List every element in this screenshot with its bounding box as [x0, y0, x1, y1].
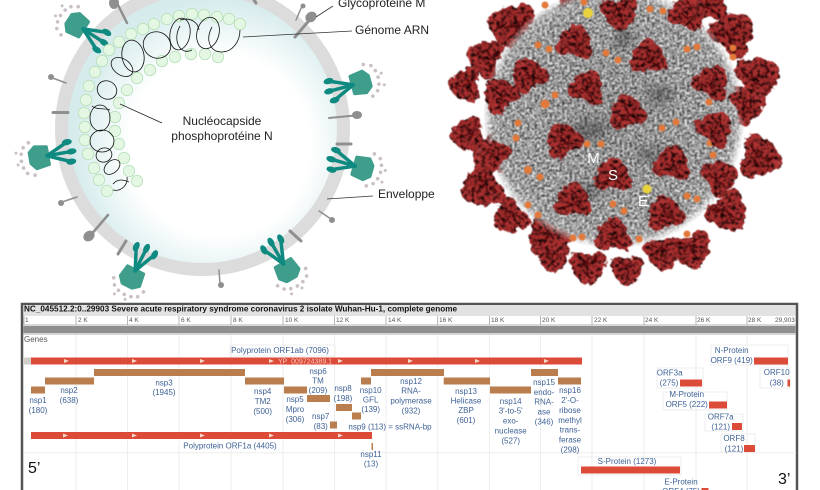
labels M, S, E: M	[587, 150, 600, 167]
ruler: 20 K	[542, 317, 556, 324]
gene labels: Polyprotein ORF1a (4405)	[183, 442, 277, 450]
ruler: 12 K	[336, 317, 350, 324]
gene labels: (346)	[535, 418, 554, 426]
gene labels: (601)	[457, 416, 476, 425]
gene labels: 2'-O-	[561, 396, 579, 405]
gene labels: (306)	[286, 415, 305, 424]
polyprotein ORF1ab bar	[24, 358, 582, 366]
ruler: 4 K	[129, 317, 139, 324]
gene labels: (298)	[561, 446, 580, 454]
polyprotein ORF1a bar	[31, 432, 372, 439]
gene labels: trans-	[560, 426, 581, 434]
gene labels: methyl	[558, 416, 582, 425]
ruler	[24, 316, 796, 325]
ruler: 6 K	[181, 317, 191, 324]
gene labels: (13)	[364, 460, 378, 468]
gene labels: nsp13	[455, 387, 477, 396]
gene labels: (638)	[60, 396, 79, 405]
spike proteins	[13, 0, 391, 307]
gene labels: nsp7	[312, 412, 330, 421]
gene labels: M-Protein	[669, 390, 704, 399]
gene labels: TM2	[255, 397, 271, 406]
ruler: 8 K	[233, 317, 243, 324]
gene labels: nsp10	[360, 386, 382, 395]
gene labels: nsp5	[286, 395, 304, 404]
label: Nucléocapside phosphoprotéine N	[120, 104, 273, 143]
gene labels: exo-	[503, 416, 519, 426]
gene labels: (500)	[253, 407, 272, 416]
ruler: 10 K	[285, 317, 299, 324]
back spikes	[447, 0, 789, 286]
gene labels: nsp8	[334, 384, 352, 393]
label: Enveloppe: Enveloppe	[378, 187, 435, 201]
viral envelope	[62, 0, 344, 270]
gene labels	[29, 346, 790, 490]
gene labels: nsp6	[309, 367, 327, 376]
label: Glycoprotéine M	[316, 0, 425, 17]
gene labels: nsp4	[254, 387, 272, 396]
gene labels: (527)	[501, 436, 520, 446]
ruler: 28 K	[748, 317, 762, 324]
gene labels: Polyprotein ORF1ab (7096)	[231, 346, 329, 355]
gene labels: ribose	[559, 406, 581, 415]
gene labels: Mpro	[286, 405, 305, 414]
labels M, S, E: S	[608, 167, 618, 184]
gene labels: nsp1	[29, 396, 47, 405]
nucleocapsid N proteins	[78, 8, 246, 197]
gene labels: ZBP	[458, 406, 474, 415]
gene labels: (1945)	[152, 388, 176, 397]
gene labels: (121)	[725, 444, 744, 454]
gene labels: Helicase	[451, 396, 482, 406]
gene labels: nuclease	[495, 426, 527, 436]
grid lines	[24, 335, 796, 490]
gene labels: nsp2	[60, 386, 78, 395]
gene labels: (209)	[309, 386, 328, 395]
gene labels: ORF8	[723, 434, 745, 443]
gene labels: TM	[312, 376, 324, 386]
gene labels: RNA-	[534, 398, 554, 406]
ruler: 22 K	[594, 317, 608, 324]
panel: genome map	[22, 304, 797, 490]
ruler: 24 K	[645, 317, 659, 324]
gene labels: (198)	[334, 394, 353, 403]
envelope E and membrane M proteins	[512, 0, 736, 242]
label: Génome ARN	[243, 23, 429, 37]
panel: coronavirus 3D rendering	[447, 0, 789, 286]
gene labels: ferase	[559, 436, 582, 444]
label: Génome ARN: Génome ARN	[355, 23, 429, 37]
ruler: 18 K	[491, 317, 505, 324]
gene labels: nsp16	[559, 386, 581, 395]
panel: virion schematic	[13, 0, 435, 307]
frame and header	[22, 304, 797, 490]
gene labels: ase	[538, 408, 551, 416]
gene labels: nsp9 (113) = ssRNA-bp	[348, 422, 432, 432]
ruler: 16 K	[439, 317, 453, 324]
gene labels: ORF9 (419)	[711, 356, 753, 365]
membrane glycoproteins M and E proteins	[48, 0, 362, 288]
ruler: 26 K	[697, 317, 711, 324]
gene labels: S-Protein (1273)	[598, 457, 657, 466]
gene labels: N-Protein	[715, 346, 749, 355]
gene labels: nsp3	[155, 378, 173, 388]
gene labels: RNA-	[401, 386, 421, 396]
label: Nucléocapside phosphoprotéine N: Nucléocapside	[183, 114, 262, 128]
RNA genome coil	[90, 15, 240, 190]
track label: Genes: Genes	[24, 335, 48, 344]
gene labels: nsp12	[400, 377, 422, 386]
gene labels: (275)	[660, 378, 679, 388]
gene labels: (83)	[314, 422, 328, 431]
spherical body	[483, 0, 745, 249]
3 prime label: 3’	[778, 471, 790, 488]
gene labels: endo-	[534, 388, 555, 397]
labels M, S, E	[587, 150, 648, 210]
genome title: NC_045512.2:0..29903 Severe acute respiratory syndrome coronavirus 2 isolate Wuhan-Hu-1, complete genome	[24, 304, 458, 314]
gene labels: ORF7a	[708, 412, 734, 422]
label: Nucléocapside phosphoprotéine N: phosphoprotéine N	[171, 129, 273, 143]
ruler: 1	[25, 317, 29, 324]
gene labels: ORF10	[764, 368, 790, 377]
ruler: 2 K	[78, 317, 88, 324]
gene labels: nsp15	[533, 378, 555, 387]
gene labels: (139)	[361, 405, 380, 414]
structural and accessory gene bars	[581, 358, 790, 490]
gene labels: 3'-to-5'	[499, 406, 523, 416]
front spikes	[470, 0, 770, 250]
gene labels: E-Protein	[664, 478, 698, 486]
gene labels: (121)	[711, 422, 730, 432]
gene labels: polymerase	[390, 396, 432, 406]
gene labels: nsp11	[360, 450, 382, 459]
gene labels: (180)	[29, 406, 48, 415]
nsp bars	[31, 369, 581, 450]
5 prime label: 5’	[28, 460, 40, 477]
gene labels: nsp14	[500, 397, 522, 406]
labels M, S, E: E	[638, 193, 648, 210]
gene labels: ORF3a	[657, 368, 683, 378]
label: Enveloppe	[327, 187, 435, 201]
gene labels: ORF5 (222)	[666, 400, 708, 409]
polyprotein ORF1ab bar: YP_009724389.1	[278, 358, 332, 366]
ruler: 14 K	[388, 317, 402, 324]
gene labels: GFL	[363, 396, 379, 404]
ruler: 29,903	[775, 317, 795, 324]
gene labels: (38)	[770, 378, 784, 388]
gene labels: (932)	[402, 406, 421, 416]
